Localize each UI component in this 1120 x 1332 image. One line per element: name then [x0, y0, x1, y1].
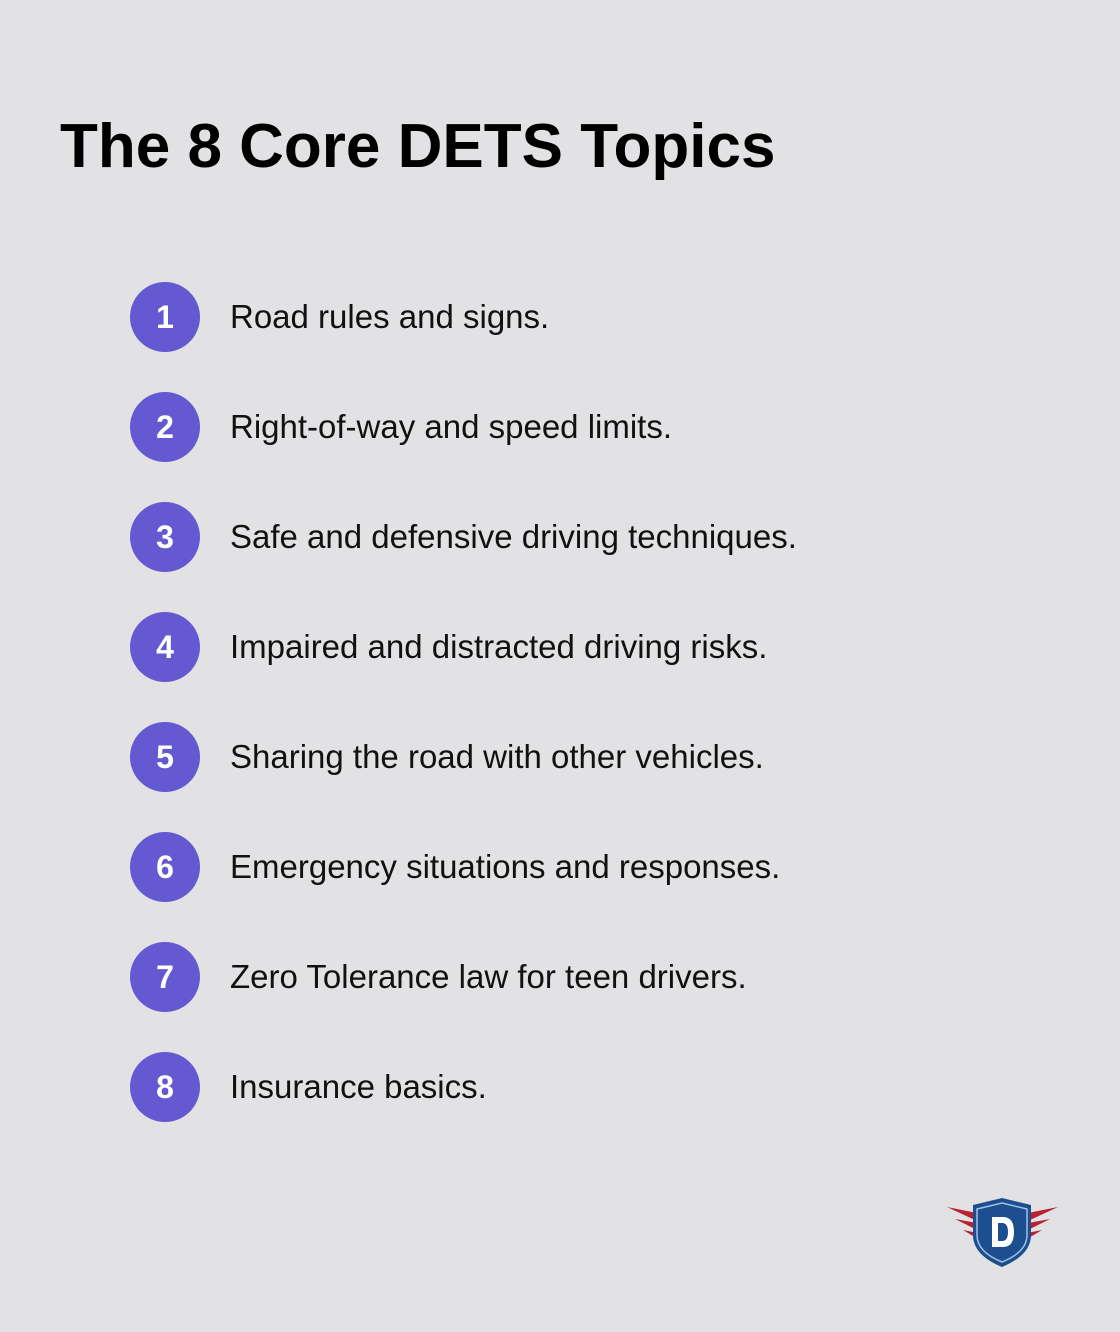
- item 2: Right-of-way and speed limits.: [230, 408, 672, 445]
- item 7: [130, 942, 747, 1012]
- item 1: 1: [156, 299, 174, 335]
- item 6: 6: [156, 849, 174, 885]
- item 6: [130, 832, 780, 902]
- item 3: [130, 502, 797, 572]
- item 5: [130, 722, 764, 792]
- item 8: 8: [156, 1069, 174, 1105]
- item 5: 5: [156, 739, 174, 775]
- item 7: 7: [156, 959, 174, 995]
- item 3: Safe and defensive driving techniques.: [230, 518, 797, 555]
- item 4: 4: [156, 629, 174, 665]
- item 2: 2: [156, 409, 174, 445]
- item 1: Road rules and signs.: [230, 298, 549, 335]
- item 4: [130, 612, 767, 682]
- item 2: [130, 392, 672, 462]
- title: The 8 Core DETS Topics: [60, 112, 775, 181]
- item 7: Zero Tolerance law for teen drivers.: [230, 958, 747, 995]
- item 4: Impaired and distracted driving risks.: [230, 628, 767, 665]
- item 1: [130, 282, 549, 352]
- item 5: Sharing the road with other vehicles.: [230, 738, 764, 775]
- item 8: Insurance basics.: [230, 1068, 487, 1105]
- item 6: Emergency situations and responses.: [230, 848, 780, 885]
- item 8: [130, 1052, 487, 1122]
- item 3: 3: [156, 519, 174, 555]
- icon: logo shield: [947, 1198, 1058, 1267]
